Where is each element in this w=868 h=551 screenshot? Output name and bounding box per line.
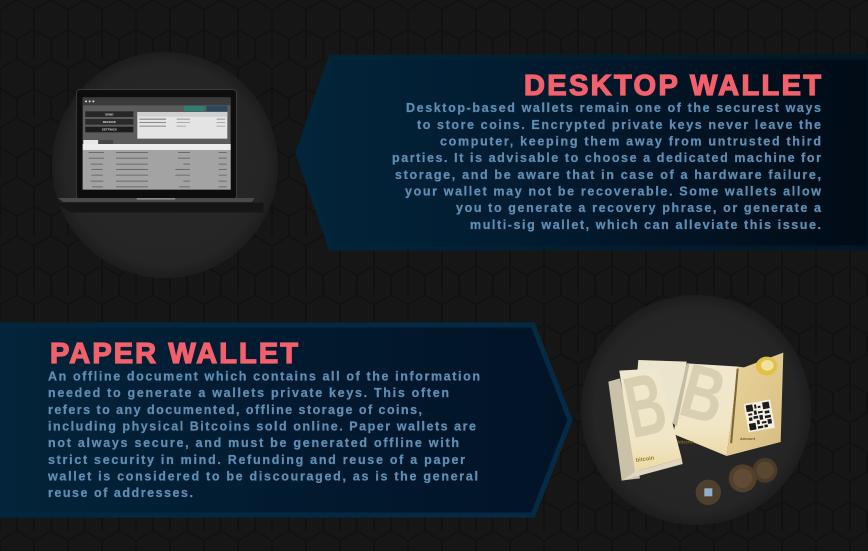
text block: paper wallet description: needed to generate a wallets private keys. This often: [48, 386, 449, 400]
open paper wallet: Amount: [740, 436, 756, 441]
text block: desktop wallet description: parties. It is advisable to choose a dedicated machine for: [392, 151, 821, 165]
text block: desktop wallet description: storage, and be aware that in case of a hardware failure,: [395, 168, 821, 182]
text block: desktop wallet description: multi-sig wallet, which can alleviate this issue.: [470, 218, 821, 232]
icon: laptop: SEND: [105, 112, 114, 116]
circle badge: paper: [581, 295, 811, 525]
text block: paper wallet description: including physical Bitcoins sold online. Paper wallets are: [48, 420, 476, 434]
open paper wallet: bitcoin: [677, 439, 694, 445]
text block: desktop wallet description: your wallet may not be recoverable. Some wallets allow: [405, 184, 821, 198]
text block: paper wallet description: refers to any documented, offline storage of coins,: [48, 403, 422, 417]
icon: paper wallets and coins: [608, 348, 783, 505]
text block: paper wallet description: strict security in mind. Refunding and reuse of a paper: [48, 453, 465, 467]
text block: desktop wallet description: computer, keeping them away from untrusted third: [440, 134, 821, 148]
icon: laptop: [57, 90, 263, 213]
text block: desktop wallet description: you to generate a recovery phrase, or generate a: [456, 201, 822, 215]
text block: desktop wallet description: [392, 101, 822, 232]
text block: desktop wallet description: Desktop-based wallets remain one of the securest ways: [406, 101, 821, 115]
text block: paper wallet description: An offline document which contains all of the information: [48, 370, 480, 384]
heading: paper wallet: PAPER WALLET: [50, 338, 298, 370]
icon: laptop: SETTINGS: [102, 128, 117, 132]
folded paper wallet: [608, 355, 683, 481]
icon: laptop: RECEIVE: [103, 120, 116, 124]
heading: desktop wallet: DESKTOP WALLET: [524, 70, 821, 102]
coins: [696, 458, 777, 505]
panel: desktop wallet: [298, 57, 868, 248]
qr code: [744, 400, 775, 432]
text block: paper wallet description: wallet is considered to be discouraged, as is the general: [47, 470, 478, 484]
open paper wallet: [633, 348, 783, 456]
text block: paper wallet description: reuse of addresses.: [48, 486, 193, 500]
folded paper wallet: B: [616, 355, 674, 457]
folded paper wallet: bitcoin: [635, 455, 655, 464]
panel: paper wallet: [0, 325, 570, 515]
text block: paper wallet description: [47, 370, 480, 500]
text block: paper wallet description: not always secure, and must be generated offline with: [48, 436, 459, 450]
text block: desktop wallet description: to store coins. Encrypted private keys never leave the: [417, 118, 821, 132]
open paper wallet: B: [672, 348, 734, 441]
circle badge: desktop: [52, 52, 278, 278]
